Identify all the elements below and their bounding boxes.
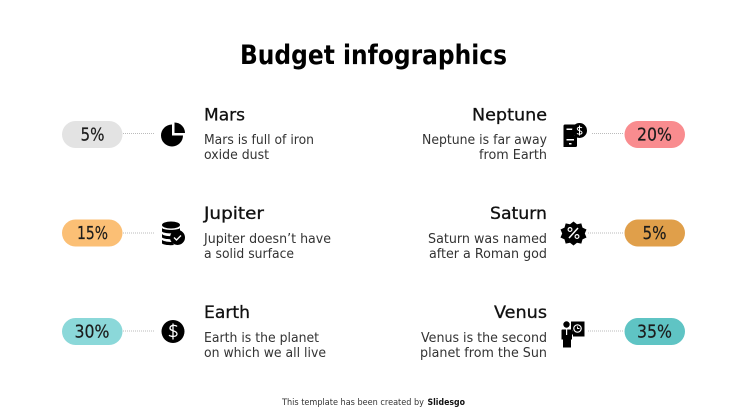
icon: percent badge: [560, 222, 586, 246]
heading: Jupiter: Jupiter: [203, 204, 264, 224]
description: Earth: [204, 331, 326, 361]
description: Saturn: [428, 232, 547, 262]
heading: Mars: Mars: [204, 106, 245, 126]
description: Neptune: Neptune is far away: [422, 133, 547, 148]
percentage pill: Earth 30%: 30%: [74, 322, 110, 342]
panel: Earth: [62, 303, 326, 361]
description: Venus: Venus is the second: [421, 331, 547, 346]
description: Mars: [204, 133, 314, 163]
heading: Neptune: Neptune: [472, 106, 547, 126]
description: Jupiter: Jupiter doesn’t have: [203, 232, 331, 247]
description: Neptune: from Earth: [479, 148, 547, 163]
panel: Venus: [420, 303, 685, 361]
description: Mars: Mars is full of iron: [204, 133, 314, 148]
icon: presenter with clock board: [562, 321, 584, 348]
percentage pill: Mars 5%: [62, 121, 122, 148]
description: Mars: oxide dust: [204, 148, 269, 163]
description: Neptune: [422, 133, 547, 163]
heading: Saturn: Saturn: [490, 204, 547, 224]
description: Jupiter: [203, 232, 331, 262]
footer credit: Slidesgo: [428, 398, 465, 408]
percentage pill: Saturn 5%: 5%: [642, 224, 666, 244]
percentage pill: Jupiter 15%: 15%: [77, 224, 108, 244]
icon: dollar coin: [162, 320, 184, 343]
description: Jupiter: a solid surface: [204, 247, 294, 262]
footer credit: This template has been created by: [281, 398, 424, 408]
percentage pill: Venus 35%: 35%: [637, 322, 672, 342]
panel: Saturn: [428, 204, 685, 262]
heading: Earth: Earth: [204, 303, 250, 323]
description: Earth: Earth is the planet: [204, 331, 319, 346]
icon: pie chart: [161, 122, 185, 146]
description: Saturn: Saturn was named: [428, 232, 547, 247]
percentage pill: Jupiter 15%: [62, 220, 122, 246]
percentage pill: Mars 5%: 5%: [80, 126, 104, 146]
description: Saturn: after a Roman god: [429, 247, 547, 262]
percentage pill: Venus 35%: [624, 318, 685, 345]
percentage pill: Earth 30%: [62, 318, 122, 345]
panel: Neptune: [422, 106, 685, 163]
percentage pill: Saturn 5%: [624, 220, 685, 246]
icon: database with check: [162, 222, 185, 245]
panel: Mars: [62, 106, 314, 163]
description: Earth: on which we all live: [204, 346, 326, 361]
description: Venus: [420, 331, 547, 361]
heading: Venus: Venus: [494, 303, 547, 323]
description: Venus: planet from the Sun: [420, 346, 547, 361]
icon: phone with dollar: [564, 123, 587, 147]
title: Budget infographics: [240, 40, 507, 71]
panel: Jupiter: [62, 204, 331, 262]
percentage pill: Neptune 20%: [624, 121, 685, 148]
percentage pill: Neptune 20%: 20%: [637, 126, 672, 146]
